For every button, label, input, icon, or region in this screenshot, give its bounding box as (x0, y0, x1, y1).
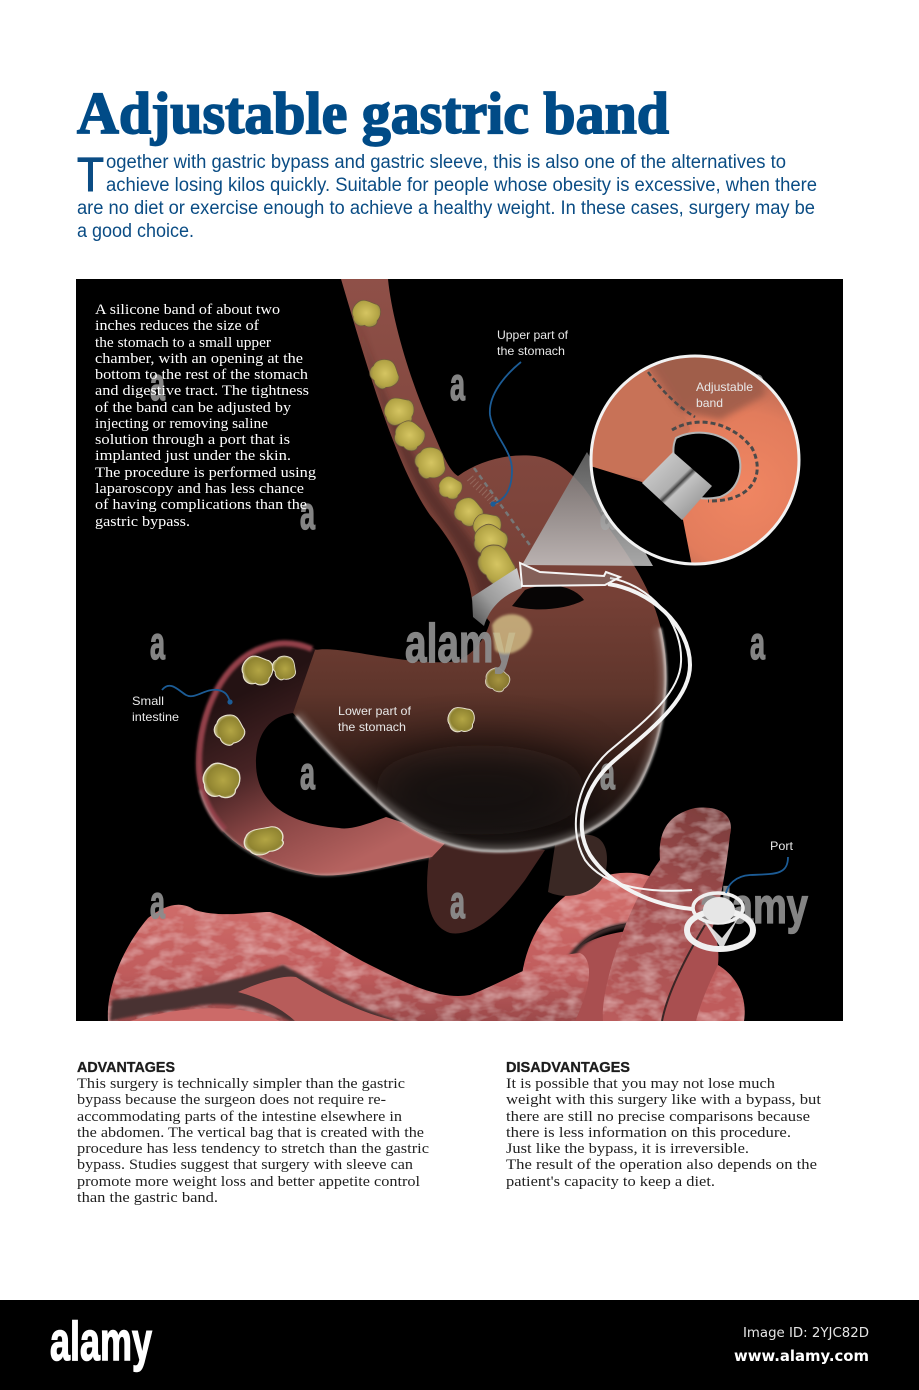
watermarks: a (600, 487, 615, 539)
watermarks: alamy (405, 612, 515, 674)
heading: advantages: ADVANTAGES (77, 1060, 175, 1076)
description text: the stomach to a small upper (95, 335, 271, 351)
intro lines: are no diet or exercise enough to achieve a healthy weight. In these cases, surgery may be (77, 198, 815, 219)
band connector (520, 563, 620, 586)
intestine: big left coil (108, 905, 589, 1021)
intestine rim (199, 643, 312, 830)
watermarks: alamy (700, 878, 808, 934)
label: small intestine: intestine (132, 710, 179, 724)
disadvantages body: The result of the operation also depends on the (506, 1157, 817, 1173)
footer bar (0, 1300, 919, 1390)
gastric band (472, 568, 522, 626)
label: upper part of the stomach: Upper part of (497, 328, 569, 342)
watermarks: a (600, 747, 615, 799)
watermarks: a (450, 876, 465, 928)
stomach rim glow (296, 628, 666, 851)
leader dots (227, 501, 496, 705)
intestine: arc shadow (568, 920, 627, 954)
intestine: vertical tube (603, 807, 731, 1021)
intro lines (77, 152, 817, 242)
small intestine loop (196, 643, 450, 875)
catheter tube (520, 563, 692, 909)
staple dots (470, 478, 495, 505)
drop cap: T (77, 149, 104, 202)
label: small intestine: Small (132, 694, 164, 708)
food particles (198, 297, 520, 857)
disadvantages body: Just like the bypass, it is irreversible. (506, 1141, 749, 1157)
description text: and digestive tract. The tightness (95, 383, 309, 399)
advantages body: procedure has less tendency to stretch than the gastric (77, 1141, 429, 1157)
food behind stomach wall (492, 614, 532, 654)
label: lower part of the stomach: Lower part of (338, 704, 412, 718)
advantages body: bypass because the surgeon does not require re- (77, 1092, 386, 1108)
disadvantages body: patient's capacity to keep a diet. (506, 1174, 715, 1190)
watermarks: a (300, 487, 315, 539)
watermarks (150, 358, 808, 934)
magnifier: adjustable band close-up (590, 350, 799, 570)
description text: The procedure is performed using (95, 465, 316, 481)
watermarks: a (150, 617, 165, 669)
lens black area (592, 466, 692, 562)
lens left tissue (592, 370, 690, 478)
intestine: middle fold tissue (238, 977, 395, 1021)
advantages body: the abdomen. The vertical bag that is created with the (77, 1125, 424, 1141)
description text: bottom to the rest of the stomach (95, 367, 309, 383)
description text: gastric bypass. (95, 514, 190, 530)
stomach opening at the band (512, 585, 584, 609)
intestine: right arc (522, 872, 650, 972)
intestine: right blob (696, 965, 745, 1021)
staple line on stomach (474, 468, 532, 548)
title: Adjustable gastric band (77, 80, 669, 146)
description text: laparoscopy and has less chance (95, 481, 304, 497)
watermarks: a (300, 747, 315, 799)
description text: of the band can be adjusted by (95, 400, 292, 416)
description text: implanted just under the skin. (95, 448, 291, 464)
disadvantages body: It is possible that you may not lose much (506, 1076, 776, 1092)
description text: inches reduces the size of (95, 318, 259, 334)
label: adjustable band: Adjustable (696, 380, 753, 394)
advantages body (77, 1076, 429, 1206)
intestine: pink tissue under the arc (574, 932, 623, 1021)
disadvantages body: there is less information on this procedure. (506, 1125, 791, 1141)
website: www.alamy.com (734, 1347, 869, 1365)
label: lower part of the stomach (338, 704, 412, 734)
footer logo: alamy (50, 1310, 152, 1372)
label: upper part of the stomach: the stomach (497, 344, 565, 358)
lens staples around opening (672, 422, 757, 501)
watermarks: a (450, 358, 465, 410)
advantages body: accommodating parts of the intestine elsewhere in (77, 1109, 403, 1125)
lens staple row (648, 372, 695, 417)
label: adjustable band: band (696, 396, 723, 410)
image id: Image ID: 2YJC82D (743, 1325, 869, 1341)
pouch left (427, 835, 545, 933)
lens grey band (642, 452, 712, 520)
label: small intestine (132, 694, 179, 724)
text block: advantages (77, 1060, 429, 1206)
intestine bottom rim (200, 790, 430, 875)
advantages body: This surgery is technically simpler than the gastric (77, 1076, 405, 1092)
port (687, 893, 753, 950)
intestine: lower fold tissue (130, 1008, 280, 1021)
stomach and oesophagus (293, 279, 666, 852)
label: upper part of the stomach (497, 328, 569, 358)
intro lines: a good choice. (77, 221, 194, 242)
heading: disadvantages: DISADVANTAGES (506, 1060, 630, 1076)
lens tissue (616, 358, 798, 562)
intestine: shadow folds (110, 965, 400, 1021)
advantages body: promote more weight loss and better appetite control (77, 1174, 420, 1190)
disadvantages body: there are still no precise comparisons because (506, 1109, 810, 1125)
disadvantages body (506, 1076, 821, 1190)
watermarks: a (750, 617, 765, 669)
duodenum pouches (427, 835, 607, 933)
label: adjustable band (696, 380, 753, 410)
label: lower part of the stomach: the stomach (338, 720, 406, 734)
intro lines: ogether with gastric bypass and gastric sleeve, this is also one of the alternatives to (106, 152, 786, 173)
description text (95, 302, 316, 530)
description text: chamber, with an opening at the (95, 351, 303, 367)
leader lines (162, 362, 788, 893)
description text: of having complications than the (95, 497, 307, 513)
disadvantages body: weight with this surgery like with a bypass, but (506, 1092, 821, 1108)
stomach body (293, 279, 666, 852)
advantages body: than the gastric band. (77, 1190, 218, 1206)
magnifier cone (522, 452, 653, 566)
lens upper tissue (650, 358, 768, 423)
oesophagus dark core (364, 345, 492, 594)
panel: stomach illustration (76, 279, 843, 1021)
intestine: second tube (662, 925, 718, 1021)
watermarks: a (150, 876, 165, 928)
lens rim (591, 356, 799, 564)
label: port: Port (770, 839, 794, 853)
port skirt (687, 911, 753, 949)
watermarks: a (150, 358, 165, 410)
advantages body: bypass. Studies suggest that surgery with sleeve can (77, 1157, 414, 1173)
text block: disadvantages (506, 1060, 821, 1190)
port cone (702, 918, 738, 950)
lower intestines (108, 807, 745, 1021)
port ring (693, 893, 743, 923)
pouch right (548, 835, 607, 896)
description text: injecting or removing saline (95, 416, 268, 432)
intro text block (77, 149, 817, 242)
intestine: tube gap shadow (662, 925, 705, 1021)
port disk (703, 897, 735, 923)
stomach lower rim highlight (296, 628, 666, 851)
description text: A silicone band of about two (95, 302, 280, 318)
watermarks: a (750, 358, 765, 410)
intro lines: achieve losing kilos quickly. Suitable for people whose obesity is excessive, when there (106, 175, 817, 196)
description text: solution through a port that is (95, 432, 290, 448)
lens opening (673, 433, 740, 498)
stomach shading (370, 745, 590, 835)
